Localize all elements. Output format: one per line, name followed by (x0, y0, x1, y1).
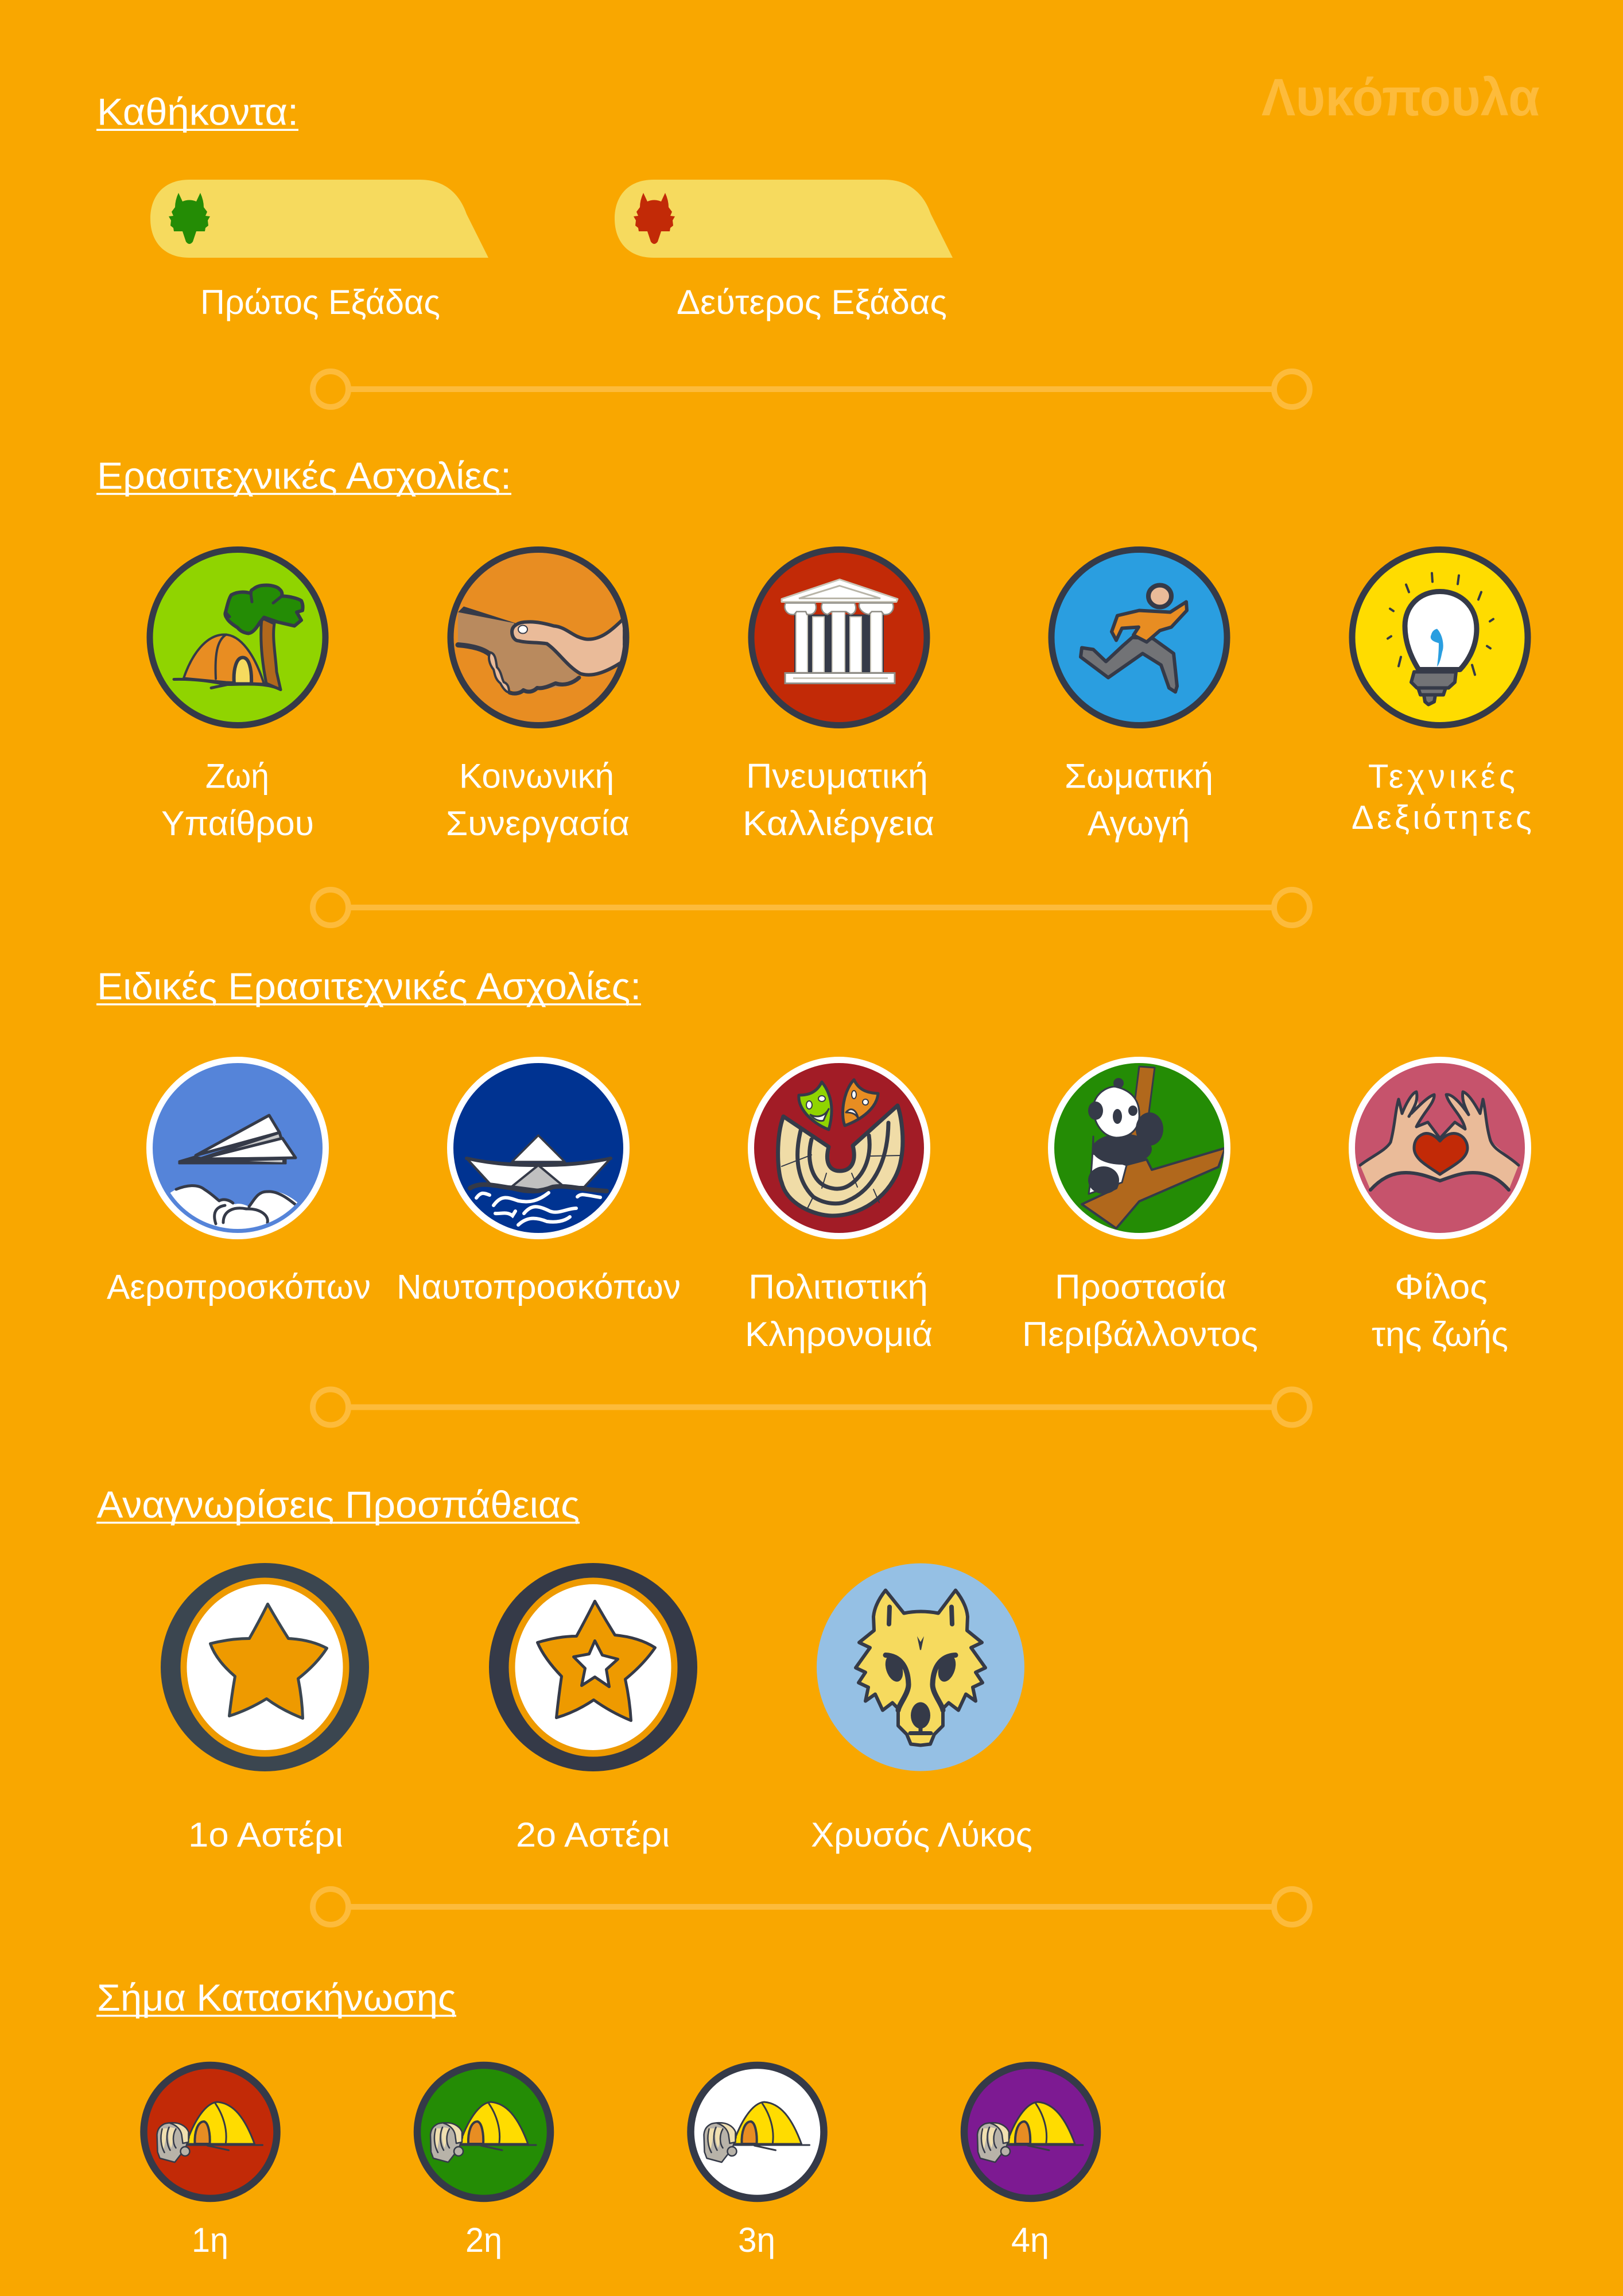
heading: hobbies: Ερασιτεχνικές Ασχολίες: (97, 455, 511, 497)
icon: theatre masks and amphitheatre (751, 1060, 927, 1236)
panel: camp badges (96, 1976, 1097, 2259)
label: friend of life: της ζωής (1372, 1315, 1508, 1353)
icon: green wolf head (169, 193, 210, 244)
label: physical education (1065, 757, 1213, 843)
divider 2 (313, 890, 1310, 925)
panel: duties (96, 91, 953, 321)
badge: first sixer (150, 180, 488, 258)
label: social cooperation: Συνεργασία (446, 804, 630, 843)
label: cultural heritage (745, 1268, 933, 1353)
label: second star: 2ο Αστέρι (516, 1816, 670, 1854)
icon: paper plane and clouds (149, 1060, 326, 1236)
label: golden wolf: Χρυσός Λύκος (811, 1816, 1032, 1854)
icon: runner (1051, 550, 1227, 726)
icon: light bulb (1352, 550, 1528, 726)
divider 3 (313, 1389, 1310, 1425)
label: technical skills: Τεχνικές (1368, 758, 1515, 796)
heading: camp badges: Σήμα Κατασκήνωσης (97, 1976, 456, 2019)
icon: camp badge 4 (964, 2065, 1097, 2198)
label: intellectual culture: Καλλιέργεια (743, 804, 934, 843)
label: second sixer: Δεύτερος Εξάδας (677, 283, 947, 321)
label: cultural heritage: Κληρονομιά (745, 1315, 933, 1353)
icon: panda on a tree (1051, 1060, 1227, 1236)
label: sea scouts: Ναυτοπροσκόπων (397, 1268, 681, 1306)
heading: effort recognitions: Αναγνωρίσεις Προσπάθειας (97, 1483, 580, 1526)
scrolls of the ionic capitals (785, 603, 894, 615)
panel: special hobbies (96, 965, 1528, 1353)
title: Λυκόπουλα: Λυκόπουλα (1261, 68, 1540, 127)
heading: duties: Καθήκοντα: (97, 91, 298, 133)
label: 3rd: 3η (738, 2221, 775, 2259)
label: outdoor life: Υπαίθρου (161, 804, 314, 843)
icon: golden wolf (817, 1564, 1024, 1771)
label: air scouts: Αεροπροσκόπων (107, 1268, 371, 1306)
label: environment protection: Προστασία (1055, 1268, 1226, 1306)
label: outdoor life (161, 757, 314, 843)
label: social cooperation: Κοινωνική (459, 757, 614, 796)
label: intellectual culture (743, 757, 934, 843)
label: environment protection (1022, 1268, 1258, 1353)
icon: first star (161, 1563, 369, 1771)
icon: paper boat (450, 1060, 627, 1236)
label: 4th: 4η (1011, 2221, 1049, 2259)
label: first sixer: Πρώτος Εξάδας (200, 283, 440, 321)
icon: handshake (451, 550, 626, 726)
icon: hands forming a heart (1352, 1060, 1528, 1236)
label: friend of life: Φίλος (1395, 1268, 1488, 1306)
label: 2nd: 2η (465, 2221, 502, 2259)
divider 4 (313, 1889, 1310, 1925)
divider 1 (313, 371, 1310, 407)
label: cultural heritage: Πολιτιστική (748, 1268, 928, 1306)
icon: camp badge 2 (417, 2065, 550, 2198)
label: first star: 1ο Αστέρι (188, 1816, 343, 1854)
icon: camp badge 3 (691, 2065, 824, 2198)
icon: camp badge 1 (143, 2065, 277, 2198)
label: environment protection: Περιβάλλοντος (1022, 1315, 1258, 1353)
label: 1st: 1η (192, 2221, 228, 2259)
icon: tent and tree (150, 550, 325, 726)
label: friend of life (1372, 1268, 1508, 1353)
icon: second star (489, 1563, 697, 1771)
badge: second sixer (615, 180, 953, 258)
panel: effort recognitions (96, 1483, 1032, 1854)
label: technical skills: Δεξιότητες (1352, 799, 1532, 836)
panel: hobbies (96, 455, 1532, 843)
label: physical education: Σωματική (1065, 757, 1213, 796)
icon: red wolf head (634, 193, 675, 244)
label: outdoor life: Ζωή (205, 757, 269, 796)
label: technical skills (1352, 758, 1532, 836)
label: intellectual culture: Πνευματική (746, 757, 928, 796)
icon: greek temple (751, 550, 927, 726)
label: physical education: Αγωγή (1088, 804, 1190, 843)
label: social cooperation (446, 757, 630, 843)
heading: special hobbies: Ειδικές Ερασιτεχνικές Ασχολίες: (97, 965, 641, 1007)
